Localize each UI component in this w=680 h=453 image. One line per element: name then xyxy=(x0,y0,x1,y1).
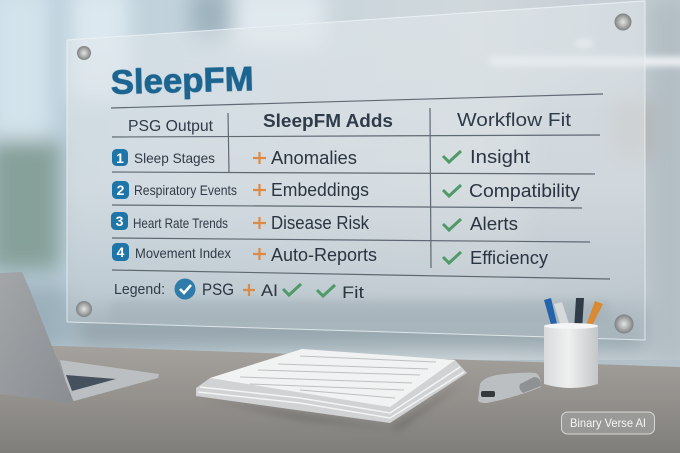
desk surface xyxy=(0,345,680,453)
column headers: PSG Output xyxy=(128,118,214,135)
row labels: Movement Index xyxy=(135,245,231,261)
legend: Fit xyxy=(342,283,364,302)
legend check after AI xyxy=(283,284,301,295)
fit text: Insight xyxy=(470,147,530,167)
legend check: fit xyxy=(317,285,335,296)
pulse oximeter xyxy=(478,373,541,403)
column headers xyxy=(128,110,571,135)
orange pen xyxy=(585,301,603,330)
legend badge: PSG xyxy=(174,278,196,300)
green checks xyxy=(443,151,461,263)
laptop xyxy=(0,272,159,403)
laptop base xyxy=(60,360,159,401)
screw bottom left xyxy=(76,301,92,317)
fit text xyxy=(469,147,580,268)
page edges xyxy=(198,367,464,418)
silver pen xyxy=(554,302,571,330)
column: SleepFM adds xyxy=(253,148,377,265)
paper stack xyxy=(196,349,470,430)
badge 1: 1 xyxy=(116,150,124,166)
legend: AI xyxy=(261,281,278,300)
screw top right xyxy=(614,14,632,30)
additions text: Disease Risk xyxy=(271,213,370,233)
laptop lid xyxy=(0,272,73,403)
table xyxy=(111,94,610,279)
column headers: SleepFM Adds xyxy=(263,111,393,131)
badge 3: 3 xyxy=(116,213,124,229)
top sheet xyxy=(210,349,455,407)
keyboard xyxy=(66,375,116,391)
blue pen xyxy=(544,298,558,328)
row labels xyxy=(133,150,237,261)
title: SleepFM xyxy=(110,60,254,102)
row labels: Sleep Stages xyxy=(134,150,215,166)
printed lines xyxy=(240,356,436,398)
additions text: Auto-Reports xyxy=(271,245,377,265)
legend xyxy=(114,278,364,302)
fit text: Alerts xyxy=(470,214,518,234)
legend: Legend: xyxy=(114,281,165,298)
row labels: Heart Rate Trends xyxy=(133,215,228,231)
fit text: Compatibility xyxy=(469,181,580,201)
legend plus xyxy=(243,284,255,296)
blurred office background xyxy=(0,0,680,360)
additions text xyxy=(271,148,377,265)
table rules xyxy=(111,94,610,279)
screw bottom right xyxy=(614,314,634,334)
stack shadow xyxy=(200,378,470,430)
column headers: Workflow Fit xyxy=(457,110,571,130)
pen cup xyxy=(544,323,598,388)
watermark badge xyxy=(562,412,654,434)
orange plus signs xyxy=(253,152,266,260)
watermark badge: Binary Verse AI xyxy=(570,416,646,430)
badge 4: 4 xyxy=(117,244,125,260)
row labels: Respiratory Events xyxy=(134,182,237,198)
dark pen xyxy=(574,298,584,330)
badge 2: 2 xyxy=(117,182,125,198)
pens xyxy=(544,298,603,330)
column: workflow fit xyxy=(443,147,580,268)
additions text: Anomalies xyxy=(271,148,357,168)
legend: PSG xyxy=(202,280,234,299)
fit text: Efficiency xyxy=(470,248,548,268)
glass panel xyxy=(67,0,645,340)
screw top left xyxy=(77,46,91,60)
additions text: Embeddings xyxy=(271,180,369,200)
streaks on glass xyxy=(110,300,610,322)
column: PSG output xyxy=(111,149,237,261)
